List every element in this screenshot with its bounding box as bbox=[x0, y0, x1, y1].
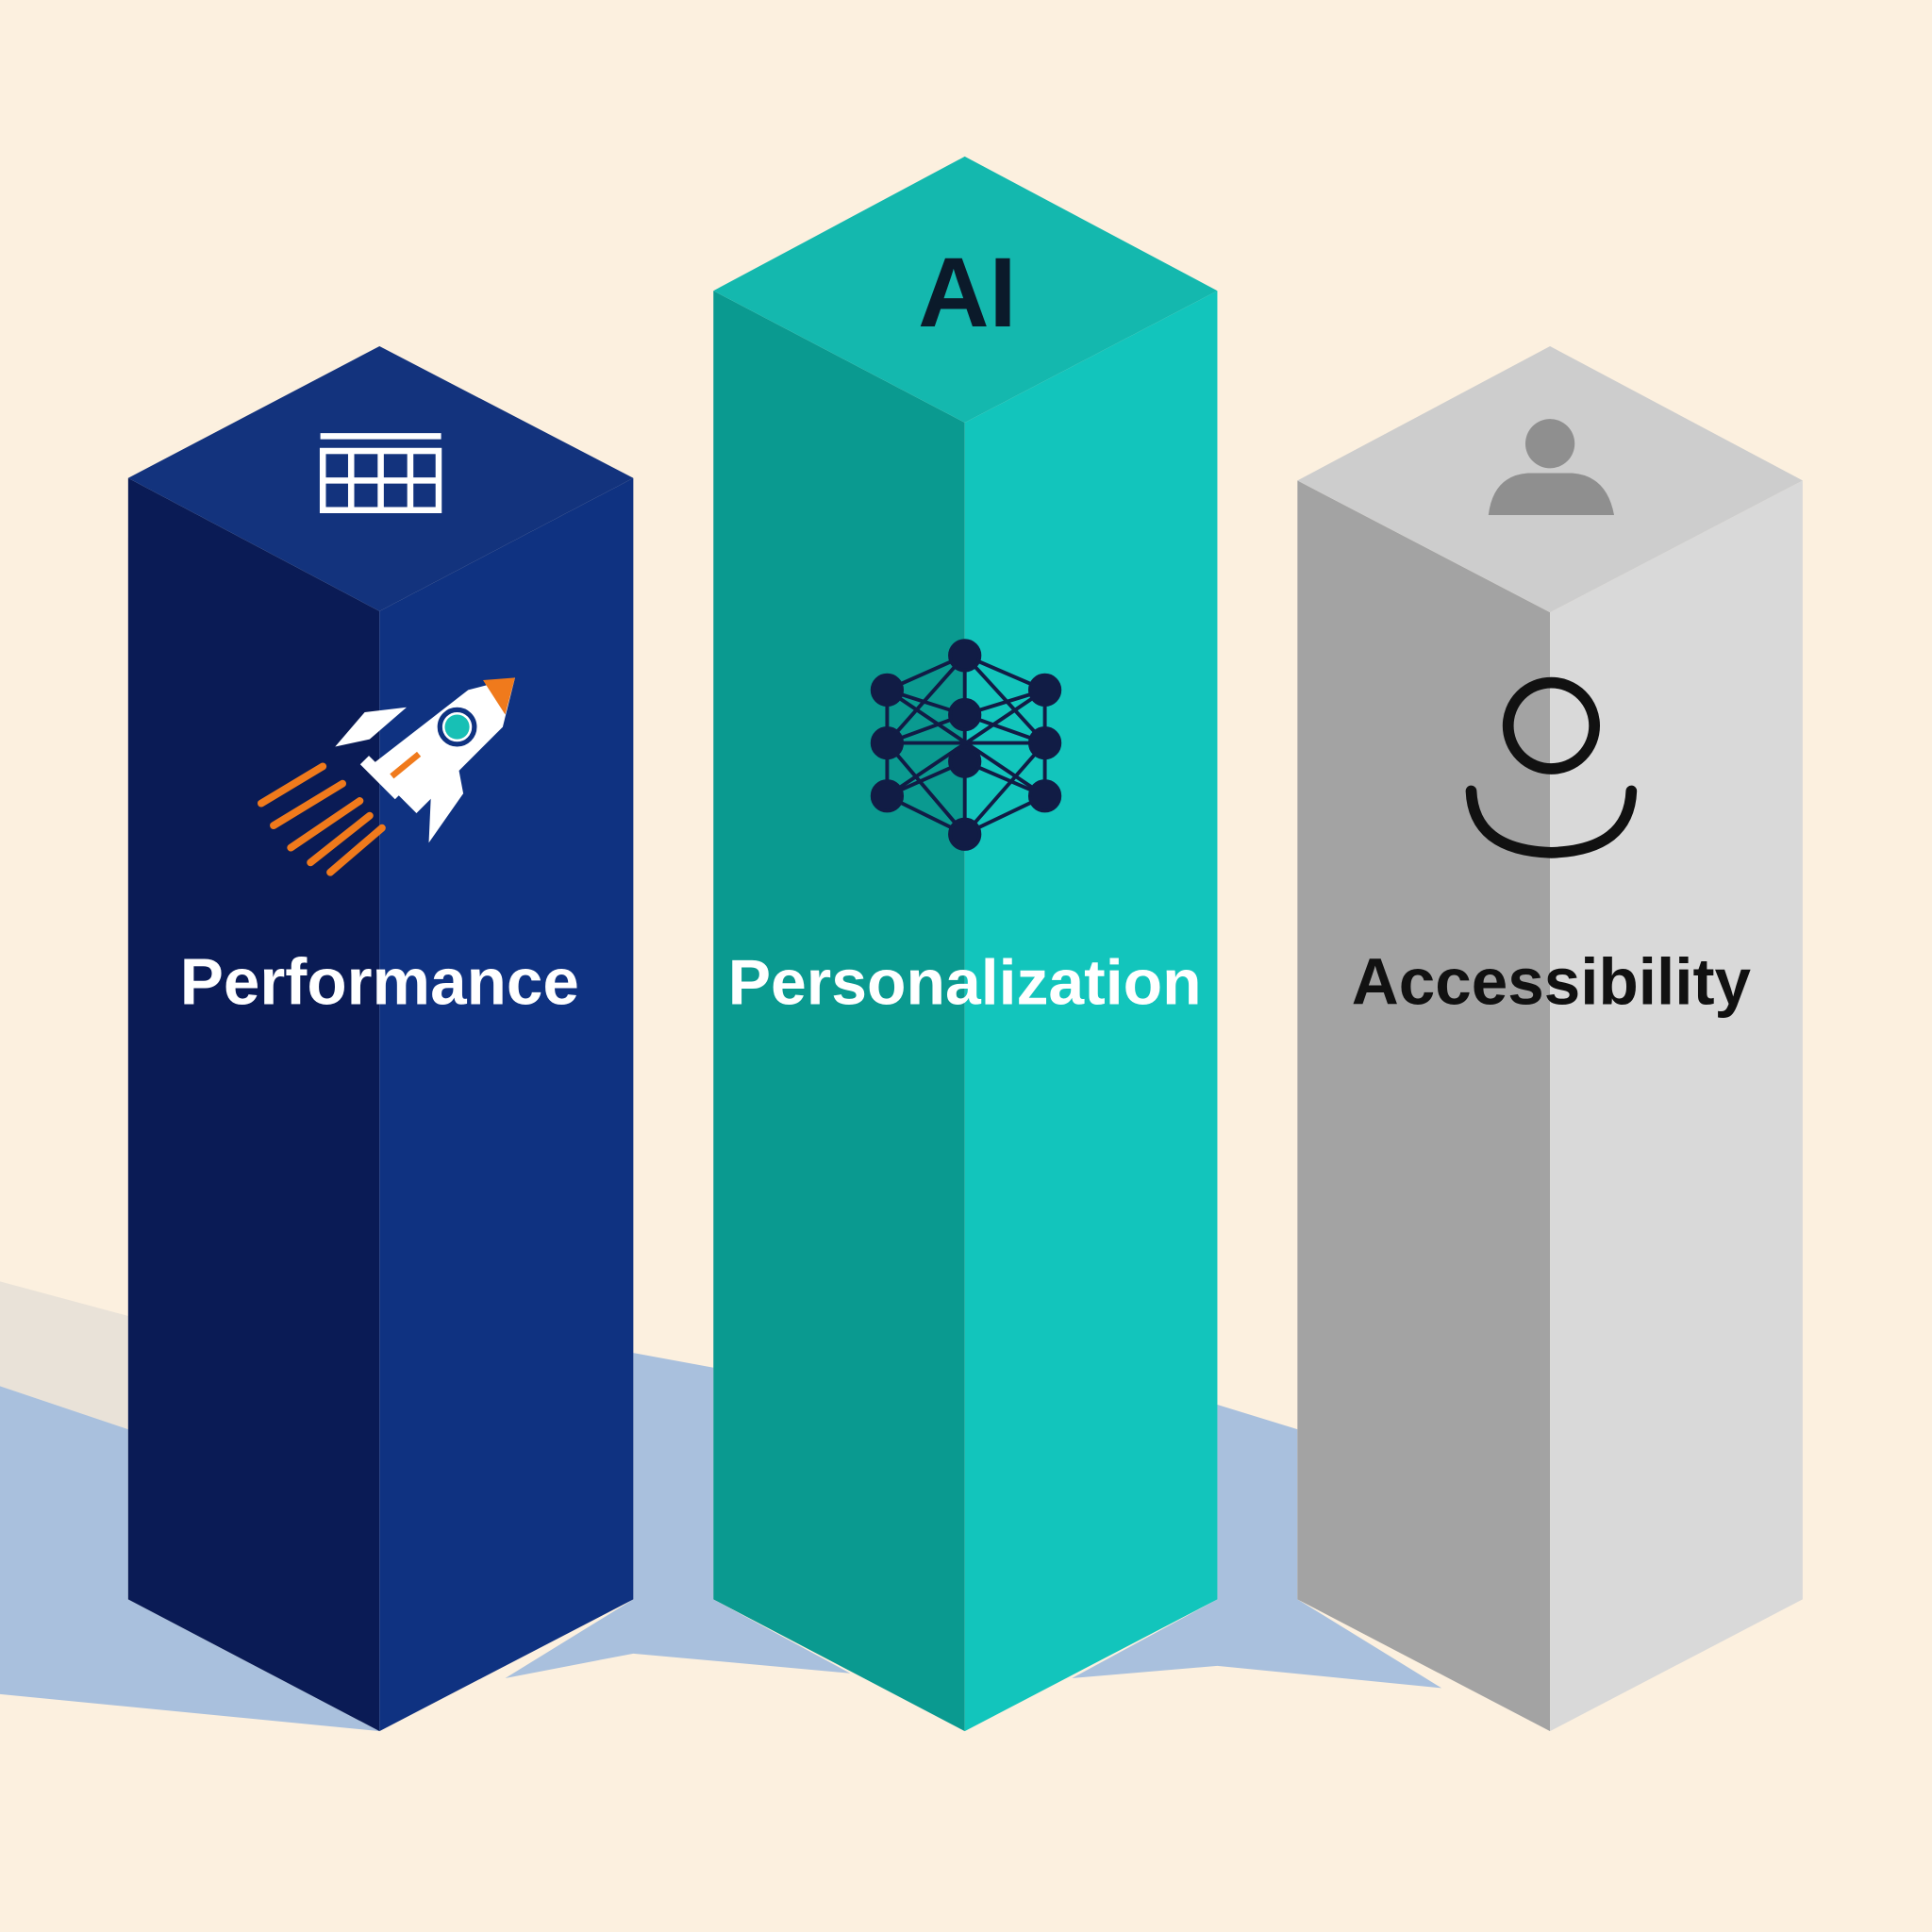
label: AI: AI bbox=[918, 238, 1017, 348]
label: Personalization: Personalization bbox=[728, 947, 1202, 1018]
icon: table bbox=[321, 436, 441, 510]
label: Accessibility: Accessibility bbox=[1352, 944, 1752, 1018]
icon: person bbox=[1489, 419, 1614, 515]
pillar: accessibility bbox=[1297, 346, 1803, 1731]
pillar: performance bbox=[128, 346, 633, 1731]
icon: neural network bbox=[873, 641, 1059, 849]
pillar: personalization bbox=[713, 157, 1217, 1731]
shadow band bbox=[0, 1281, 1441, 1731]
label: Performance: Performance bbox=[180, 944, 579, 1018]
icon: rocket bbox=[261, 677, 515, 873]
icon: smile bbox=[1472, 683, 1631, 853]
